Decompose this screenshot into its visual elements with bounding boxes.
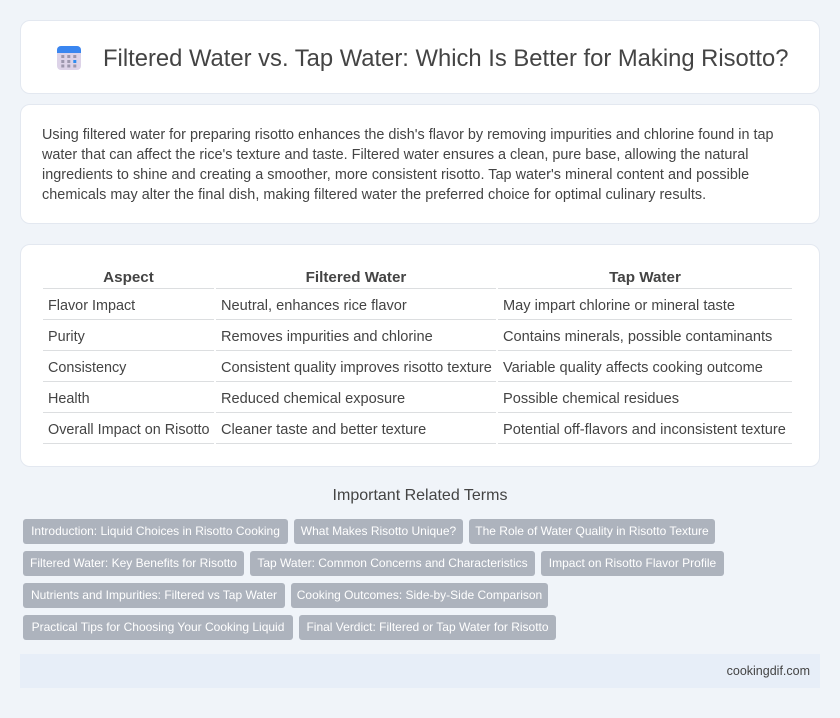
tag: Filtered Water: Key Benefits for Risotto xyxy=(30,556,237,570)
row: overall impact: Potential off-flavors and inconsistent texture xyxy=(503,422,786,438)
row: consistency: Consistency xyxy=(48,360,126,376)
related terms heading: Important Related Terms xyxy=(333,487,507,504)
tag: Final Verdict: Filtered or Tap Water for Risotto xyxy=(306,620,549,634)
tag xyxy=(23,583,285,608)
tag: Practical Tips for Choosing Your Cooking Liquid xyxy=(32,620,284,634)
row: flavor impact: Flavor Impact xyxy=(48,298,135,314)
tag xyxy=(291,583,548,608)
tag xyxy=(23,551,244,576)
header: aspect: Aspect xyxy=(103,269,154,286)
row: health: Health xyxy=(48,391,90,407)
tag xyxy=(23,519,288,544)
tag xyxy=(23,615,293,640)
tag: Introduction: Liquid Choices in Risotto Cooking xyxy=(31,524,280,538)
tag: The Role of Water Quality in Risotto Texture xyxy=(475,524,709,538)
tag xyxy=(299,615,556,640)
tag: What Makes Risotto Unique? xyxy=(301,524,456,538)
related terms tags xyxy=(23,519,724,640)
intro text xyxy=(42,127,773,203)
row: health: Possible chemical residues xyxy=(503,391,679,407)
row: health: Reduced chemical exposure xyxy=(221,391,405,407)
row: overall impact xyxy=(48,422,786,438)
row: flavor impact xyxy=(48,298,735,314)
row: flavor impact: Neutral, enhances rice flavor xyxy=(221,298,407,314)
row: overall impact: Cleaner taste and better texture xyxy=(221,422,426,438)
intro text: chemicals may alter the final dish, making filtered water the preferred choice for optimal culinary results. xyxy=(42,187,706,203)
tag: Nutrients and Impurities: Filtered vs Tap Water xyxy=(31,588,277,602)
tag xyxy=(469,519,715,544)
tag xyxy=(294,519,463,544)
row: purity: Contains minerals, possible contaminants xyxy=(503,329,772,345)
row: purity: Purity xyxy=(48,329,85,345)
intro text: ingredients to shine and creating a smoother, more consistent risotto. Tap water's mineral content and possible xyxy=(42,167,749,183)
row: consistency xyxy=(48,360,763,376)
footer source: cookingdif.com xyxy=(727,664,810,678)
header: tap water: Tap Water xyxy=(609,269,681,286)
title card xyxy=(20,20,820,94)
row: health xyxy=(48,391,679,407)
panel: comparison table xyxy=(20,244,820,467)
row: consistency: Consistent quality improves risotto texture xyxy=(221,360,492,376)
tag: Cooking Outcomes: Side-by-Side Comparison xyxy=(297,588,542,602)
footer bar xyxy=(20,654,820,688)
row: flavor impact: May impart chlorine or mineral taste xyxy=(503,298,735,314)
intro text: water that can affect the rice's texture and taste. Filtered water ensures a clean, pure base, allowing the natural xyxy=(42,147,748,163)
row: consistency: Variable quality affects cooking outcome xyxy=(503,360,763,376)
intro text: Using filtered water for preparing risotto enhances the dish's flavor by removing impurities and chlorine found in tap xyxy=(42,127,773,143)
row: purity xyxy=(48,329,772,345)
panel: introduction xyxy=(20,104,820,224)
tag xyxy=(250,551,535,576)
row: overall impact: Overall Impact on Risotto xyxy=(48,422,210,438)
icon: calendar xyxy=(57,46,81,70)
tag: Impact on Risotto Flavor Profile xyxy=(549,556,716,570)
header: filtered water: Filtered Water xyxy=(306,269,406,286)
tag: Tap Water: Common Concerns and Characteristics xyxy=(257,556,528,570)
tag xyxy=(541,551,724,576)
title: Filtered Water vs. Tap Water: Which Is Better for Making Risotto? xyxy=(103,45,788,72)
row: purity: Removes impurities and chlorine xyxy=(221,329,433,345)
